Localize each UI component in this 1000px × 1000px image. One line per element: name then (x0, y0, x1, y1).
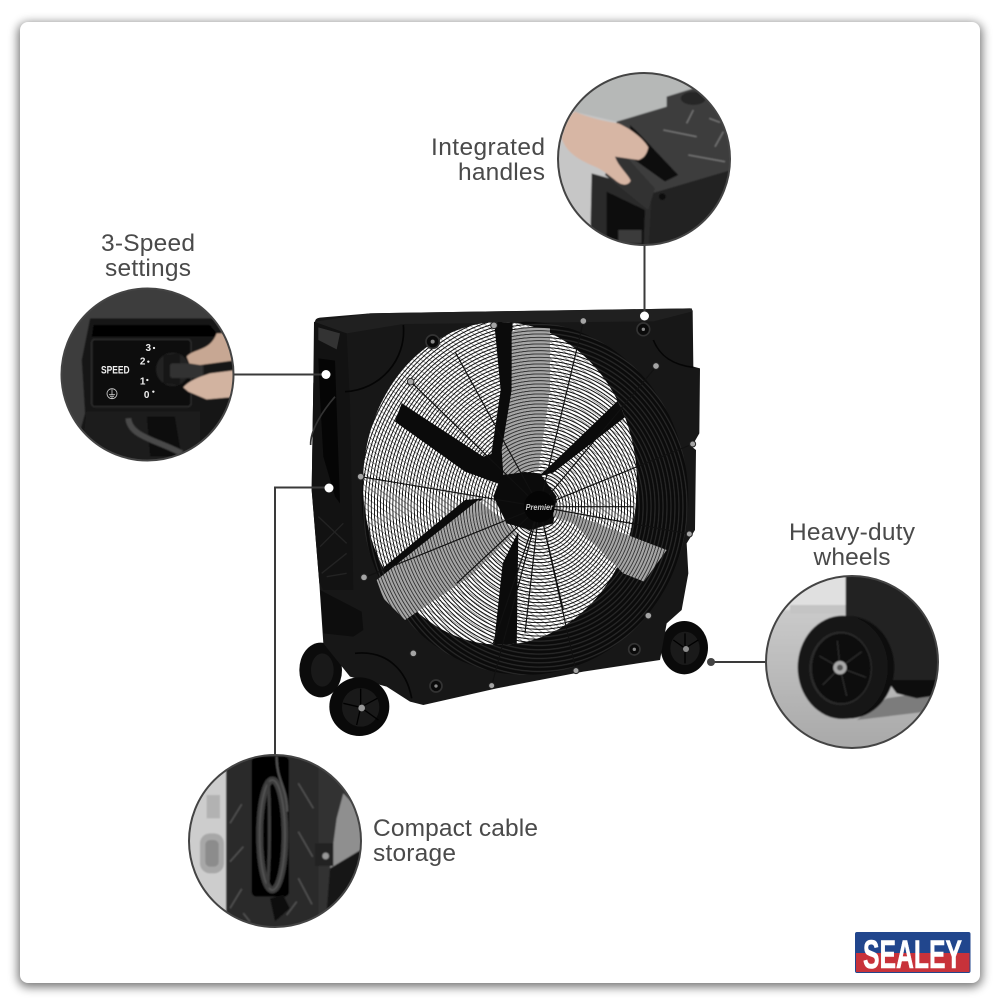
inset photo: handle (559, 74, 729, 244)
inset photo: speed dial (62, 290, 232, 460)
right wheel (661, 621, 708, 674)
grille struts and corner wedges (383, 322, 625, 645)
label: compact cable storage: storage (373, 840, 456, 867)
label: 3-speed settings: 3-Speed (101, 230, 195, 257)
grille screws (357, 318, 696, 689)
label: 3-speed settings: settings (105, 255, 191, 282)
fan blade: right (553, 507, 667, 582)
body bolts (426, 323, 650, 692)
inset photo: cable storage (187, 753, 363, 930)
connector: speed settings (233, 370, 330, 379)
connector: wheels (707, 658, 766, 666)
hub with logo (524, 491, 555, 522)
inset photo: wheel (763, 573, 941, 750)
inset border: handle (558, 73, 730, 245)
grille moire overlay (363, 322, 637, 645)
connector: cable storage (275, 484, 334, 755)
inset photo: speed dial: 0 (144, 390, 150, 401)
radial grille wires (361, 322, 693, 686)
fan blade: lower left (377, 500, 517, 620)
label: compact cable storage: Compact cable (373, 815, 538, 842)
front left wheel (329, 677, 389, 736)
fan body (312, 308, 700, 705)
hub with logo: Premier (526, 503, 554, 512)
top surface of body (315, 308, 693, 333)
inset border: cable storage (189, 755, 361, 927)
connector: integrated handles (640, 245, 649, 320)
inset photo: speed dial: 1 (140, 376, 146, 387)
left side face with handle and slot (311, 322, 363, 637)
speed panel text: SPEED (101, 364, 130, 376)
corner panel curve (345, 325, 404, 392)
rear left wheel (299, 643, 342, 697)
inset photo: speed dial: 3 (146, 343, 152, 354)
label: heavy-duty wheels: wheels (812, 544, 890, 571)
label: integrated handles: Integrated (431, 134, 545, 161)
inset border: speed dial (62, 288, 234, 460)
fan product photo (299, 308, 708, 736)
label: heavy-duty wheels: Heavy-duty (789, 519, 916, 546)
inset border: wheel (766, 576, 938, 748)
fan blade: top (502, 327, 550, 475)
white grille aperture (363, 322, 637, 645)
label: integrated handles: handles (458, 159, 545, 186)
outer grille ring (362, 322, 688, 675)
inset photo: speed dial: 2 (140, 357, 146, 368)
